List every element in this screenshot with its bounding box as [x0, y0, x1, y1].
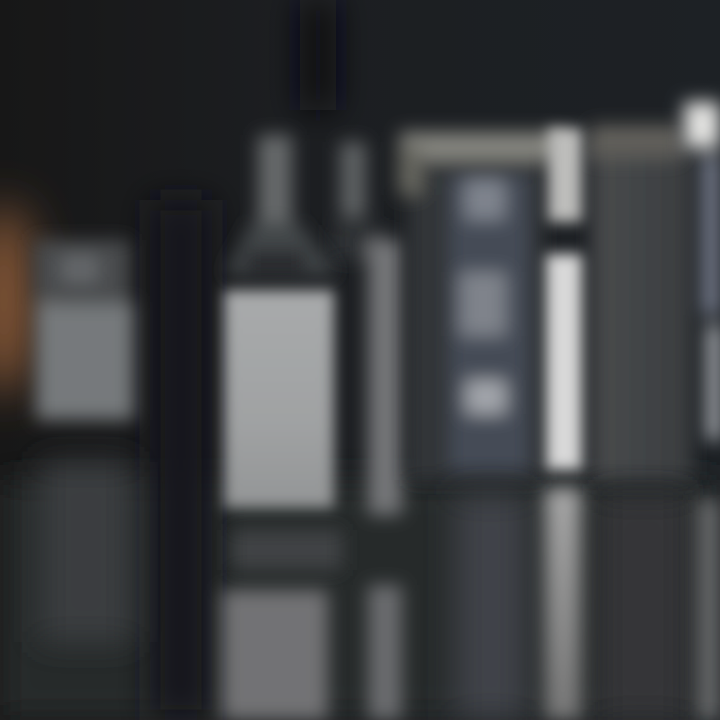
bottle top	[34, 240, 130, 300]
bottle body	[36, 302, 134, 420]
far right reflection	[698, 500, 720, 720]
back bottle	[332, 142, 402, 515]
neck	[258, 135, 292, 225]
shoulder	[224, 222, 338, 275]
far right bottle	[684, 102, 720, 440]
light spot middle	[460, 272, 506, 336]
shoulder	[332, 225, 382, 260]
light spot lower	[466, 380, 506, 414]
box top band right	[590, 125, 680, 159]
neck	[340, 142, 366, 218]
white strip upper	[548, 128, 582, 222]
top dark strip	[300, 0, 336, 110]
box top band	[400, 132, 565, 160]
cap	[684, 102, 720, 148]
grey box right	[592, 140, 692, 480]
base	[232, 530, 342, 570]
centre bottle	[224, 135, 342, 570]
bottle highlight	[62, 255, 98, 283]
centre bottle reflection	[222, 590, 328, 720]
body	[368, 240, 402, 515]
centre bottle label	[224, 290, 334, 508]
dark column	[150, 200, 212, 720]
orange glow	[0, 204, 34, 396]
white strip lower	[546, 254, 582, 470]
light spot upper	[465, 180, 505, 220]
box left edge	[398, 145, 422, 195]
inner blue panel	[450, 175, 528, 470]
strip reflection	[545, 488, 581, 720]
back bottle reflection	[368, 585, 402, 720]
body	[702, 155, 720, 315]
large box	[398, 132, 565, 480]
grey box reflection	[598, 495, 688, 720]
floor	[0, 480, 720, 720]
left bottle	[34, 240, 134, 420]
left bottle reflection	[40, 462, 132, 642]
dark band	[246, 252, 306, 270]
box body	[408, 155, 543, 480]
body lower	[708, 325, 720, 440]
box reflection	[455, 495, 527, 720]
